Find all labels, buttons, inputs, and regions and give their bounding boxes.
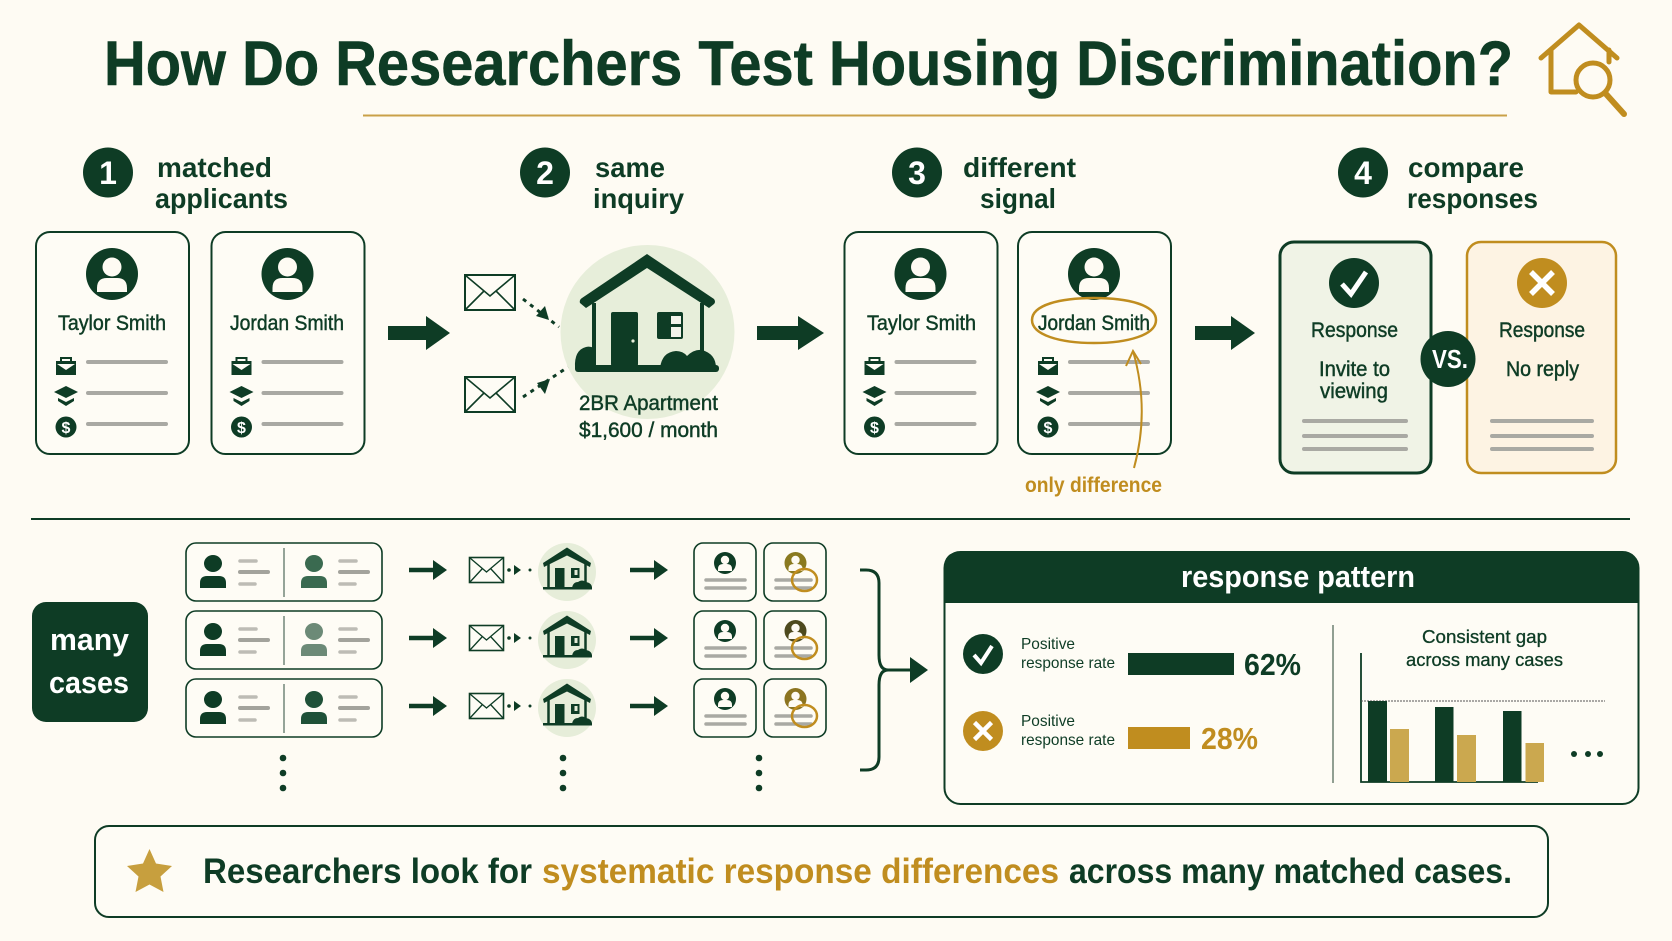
label: many cases [32,602,148,722]
positive rate row: 62% [1244,647,1301,682]
step 4 heading: 4 [1354,155,1372,191]
step 1 heading [83,148,288,214]
step 1 heading: matched [157,152,272,183]
panel: positive response: Invite to [1319,358,1390,381]
bar chart [1361,653,1605,782]
step 3 heading: 3 [908,155,926,191]
panel: response pattern [944,552,1638,804]
applicant card: Jordan Smith with highlighted name: Jordan Smith [1038,312,1150,335]
callout: conclusion: systematic response differences [542,852,1059,891]
callout: conclusion: across many matched cases. [1069,852,1512,891]
applicant card: Taylor Smith repeat: Taylor Smith [867,312,976,335]
icon: envelope bottom [465,377,515,412]
case row 2 [186,611,826,669]
callout: conclusion [95,826,1548,917]
step 2 heading: same [595,152,665,183]
icon: star [127,849,172,892]
title: How Do Researchers Test Housing Discrimination? [104,29,1513,99]
step 2 heading: inquiry [593,183,684,214]
case row 3 [186,679,826,737]
panel: positive response: Response [1311,319,1398,342]
chart heading [1406,627,1563,670]
positive rate row [963,634,1301,682]
negative rate row: Positive [1021,713,1075,730]
applicant card: Jordan Smith: Jordan Smith [230,312,344,335]
positive rate row: response rate [1021,655,1115,672]
case row 1 [186,543,826,601]
badge: vs [1420,331,1476,387]
applicant card: Taylor Smith: Taylor Smith [58,312,166,335]
arrow: step 2 to step 3 [757,316,824,350]
step 4 heading [1338,148,1538,214]
panel: positive response [1280,242,1431,473]
arrow: only difference pointer [1126,351,1142,468]
negative rate row: response rate [1021,732,1115,749]
step 4 heading: compare [1408,152,1524,183]
icon: house with apartment label: $1,600 / month [579,419,718,442]
icon: house with apartment label [560,245,734,442]
applicant card: Taylor Smith [36,232,189,454]
panel: no reply: No reply [1506,358,1579,381]
panel: positive response: viewing [1320,380,1388,403]
panel: no reply: Response [1499,319,1585,342]
arrow: dotted from bottom envelope [523,367,568,397]
brace with arrow [860,570,928,770]
positive rate row: Positive [1021,636,1075,653]
step 3 heading: signal [980,183,1056,214]
badge: vs: VS. [1432,344,1468,374]
chart heading: Consistent gap [1422,627,1547,647]
arrow: step 3 to step 4 [1195,316,1255,350]
step 1 heading: 1 [99,155,117,191]
icon: house with magnifier [1541,25,1624,114]
panel header: response pattern [1181,559,1415,594]
chart heading: across many cases [1406,650,1563,670]
icon: envelope top [465,275,515,310]
applicant card: Jordan Smith [212,232,364,454]
panel: no reply [1467,242,1616,473]
step 1 heading: applicants [155,183,288,214]
negative rate row [963,711,1258,756]
icon: house with apartment label: 2BR Apartment [579,392,718,415]
panel header [944,552,1638,603]
step 3 heading: different [963,152,1076,183]
vertical ellipsis markers [280,755,762,791]
arrow: dotted from top envelope [523,299,559,327]
label: many cases: many [50,622,130,657]
step 2 heading: 2 [536,155,554,191]
label: many cases: cases [49,665,129,700]
applicant card: Taylor Smith repeat [844,232,998,454]
callout: conclusion: Researchers look for [203,852,532,891]
label: only difference: only difference [1025,474,1162,497]
negative rate row: 28% [1201,721,1258,756]
step 2 heading [520,148,684,214]
arrow: step 1 to step 2 [388,316,450,350]
step 3 heading [892,148,1076,214]
applicant card: Jordan Smith with highlighted name [1018,232,1171,454]
step 4 heading: responses [1407,183,1538,214]
